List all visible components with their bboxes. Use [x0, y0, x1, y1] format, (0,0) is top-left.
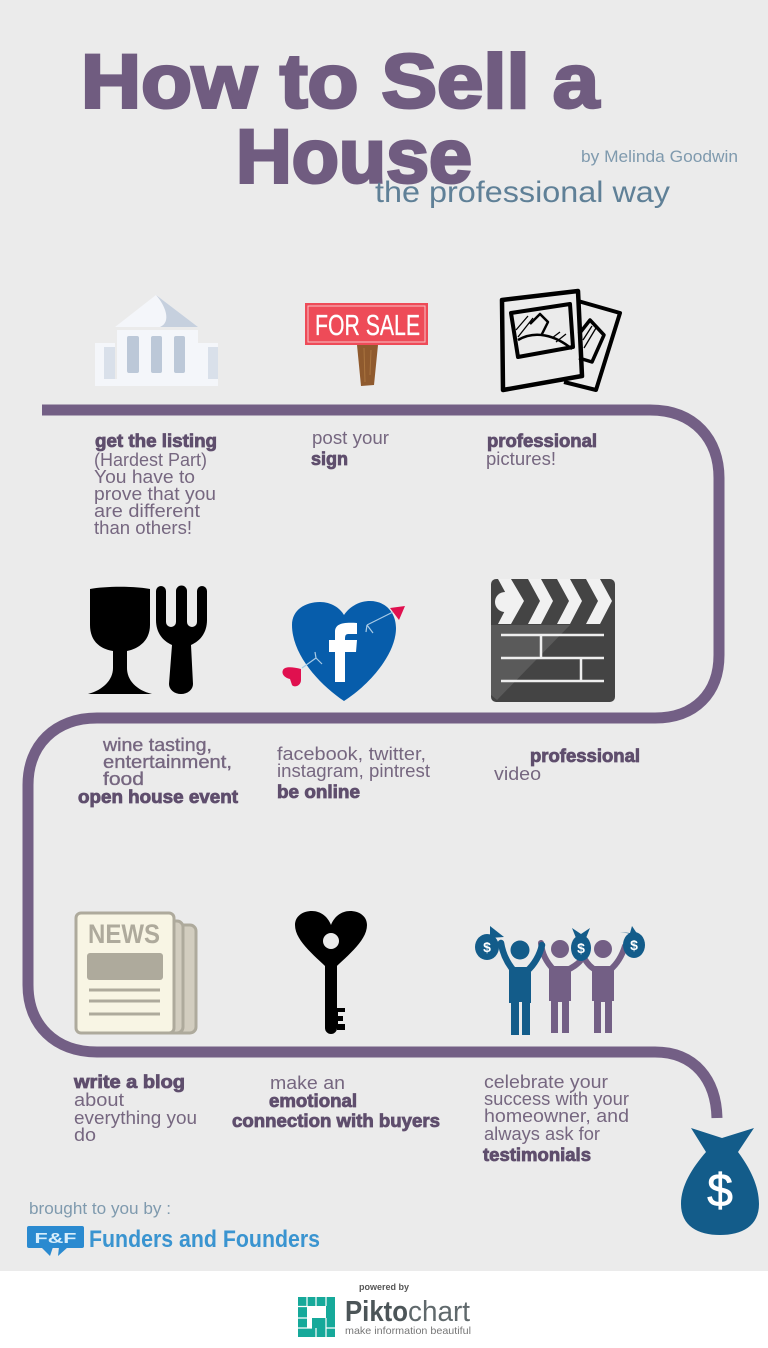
logo: piktochart [298, 1296, 471, 1337]
text: professional video: professional [530, 746, 640, 766]
text: write a blog: write a blog [73, 1072, 185, 1092]
icon: newspaper [76, 913, 196, 1033]
text: professional pictures [486, 431, 597, 469]
powered by: powered by [359, 1282, 409, 1292]
author: by Melinda Goodwin [581, 147, 738, 166]
icon: newspaper: NEWS [88, 919, 160, 949]
text: get the listing: You have to [94, 467, 195, 487]
text: celebrate: celebrate your [484, 1072, 608, 1092]
icon: clapperboard [491, 579, 615, 702]
text: get the listing [94, 431, 217, 538]
icon: money bag: $ [707, 1164, 733, 1216]
text: post your sign [311, 428, 389, 469]
text: celebrate: homeowner, and [484, 1106, 629, 1126]
title: House [236, 114, 472, 200]
text: open house event: entertainment, [103, 752, 232, 772]
icon: bank [95, 295, 218, 386]
text: be online [277, 744, 430, 802]
title: How to Sell a [81, 40, 600, 124]
text: get the listing: (Hardest Part) [94, 450, 207, 470]
text: write a blog: about [74, 1090, 124, 1110]
text: emotional connection: emotional [269, 1091, 357, 1111]
text: celebrate: testimonials [483, 1145, 591, 1165]
icon: people with money bags: $ [483, 939, 491, 955]
subtitle: the professional way [375, 176, 670, 209]
text: open house event: open house event [78, 787, 238, 807]
logo: funders and founders: F&F [34, 1230, 76, 1247]
logo: piktochart: chart [408, 1296, 470, 1328]
title [81, 40, 600, 200]
icon: money bag [681, 1128, 759, 1235]
text: emotional connection: make an [270, 1073, 345, 1093]
text: open house event [78, 735, 238, 807]
icon: for sale sign [305, 303, 428, 386]
text: professional pictures: professional [487, 431, 597, 451]
text: write a blog [73, 1072, 197, 1145]
text: brought to you by: brought to you by : [29, 1199, 171, 1218]
text: get the listing: than others! [94, 518, 192, 538]
text: celebrate: always ask for [484, 1124, 600, 1144]
text: open house event: food [103, 769, 144, 789]
text: write a blog: everything you [74, 1108, 197, 1128]
text: get the listing: prove that you [94, 484, 216, 504]
text: celebrate [483, 1072, 629, 1165]
logo: funders and founders: Funders and Founders [89, 1226, 320, 1253]
icon: heart key [295, 911, 367, 1034]
text: professional pictures: pictures! [486, 449, 556, 469]
text: post your sign: sign [311, 449, 348, 469]
text: celebrate: success with your [484, 1089, 629, 1109]
logo: funders and founders [27, 1226, 320, 1256]
text: post your sign: post your [312, 428, 389, 448]
text: be online: facebook, twitter, [277, 744, 426, 764]
icon: people with money bags [475, 926, 645, 1035]
text: open house event: wine tasting, [102, 735, 212, 755]
text: be online: be online [277, 782, 360, 802]
text: professional video: video [494, 764, 541, 784]
logo: piktochart: make information beautiful [345, 1325, 471, 1337]
icon: people with money bags: $ [630, 937, 638, 953]
icon: for sale sign: FOR SALE [315, 310, 420, 342]
logo: piktochart: Pikto [345, 1296, 408, 1328]
text: get the listing: are different [94, 501, 200, 521]
text: emotional connection [232, 1073, 440, 1131]
text: get the listing: get the listing [95, 431, 217, 451]
icon: facebook heart [282, 601, 405, 701]
winding path [28, 410, 719, 1118]
text: professional video [494, 746, 640, 784]
text: emotional connection: connection with buyers [232, 1111, 440, 1131]
text: write a blog: do [74, 1125, 96, 1145]
icon: photos [502, 291, 620, 390]
text: be online: instagram, pintrest [277, 761, 430, 781]
icon: wine glass and fork [88, 586, 207, 694]
icon: people with money bags: $ [577, 940, 585, 956]
